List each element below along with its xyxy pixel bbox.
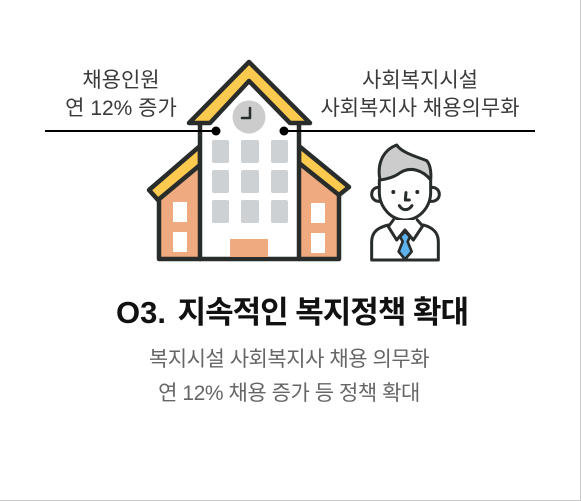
shirt: [372, 225, 438, 260]
roof: [189, 62, 310, 123]
text: left label: [65, 69, 177, 120]
facial features: [391, 190, 419, 210]
face and ears: [379, 180, 431, 220]
icon: person in shirt and tie: [372, 145, 439, 260]
door: [230, 239, 268, 257]
main block: [189, 62, 310, 259]
text: left label: 연 12% 증가: [65, 97, 177, 120]
horizon line: [45, 126, 535, 136]
clock: [232, 100, 266, 134]
hair: [379, 145, 431, 180]
text: left label: 채용인원: [82, 69, 160, 92]
text: right label: 사회복지사 채용의무화: [320, 97, 520, 120]
text: right label: 사회복지시설: [362, 69, 478, 92]
text: right label: [320, 69, 520, 120]
right wing: [299, 146, 349, 259]
icon: school building: [149, 62, 349, 259]
collar: [388, 220, 423, 240]
text: description: 연 12% 채용 증가 등 정책 확대: [158, 382, 420, 405]
tie: [399, 232, 412, 259]
heading: O3. 지속적인 복지정책 확대: [116, 295, 468, 330]
left wing: [149, 146, 200, 259]
text: description: [149, 348, 429, 405]
text: description: 복지시설 사회복지사 채용 의무화: [149, 348, 429, 371]
windows: [212, 140, 288, 223]
